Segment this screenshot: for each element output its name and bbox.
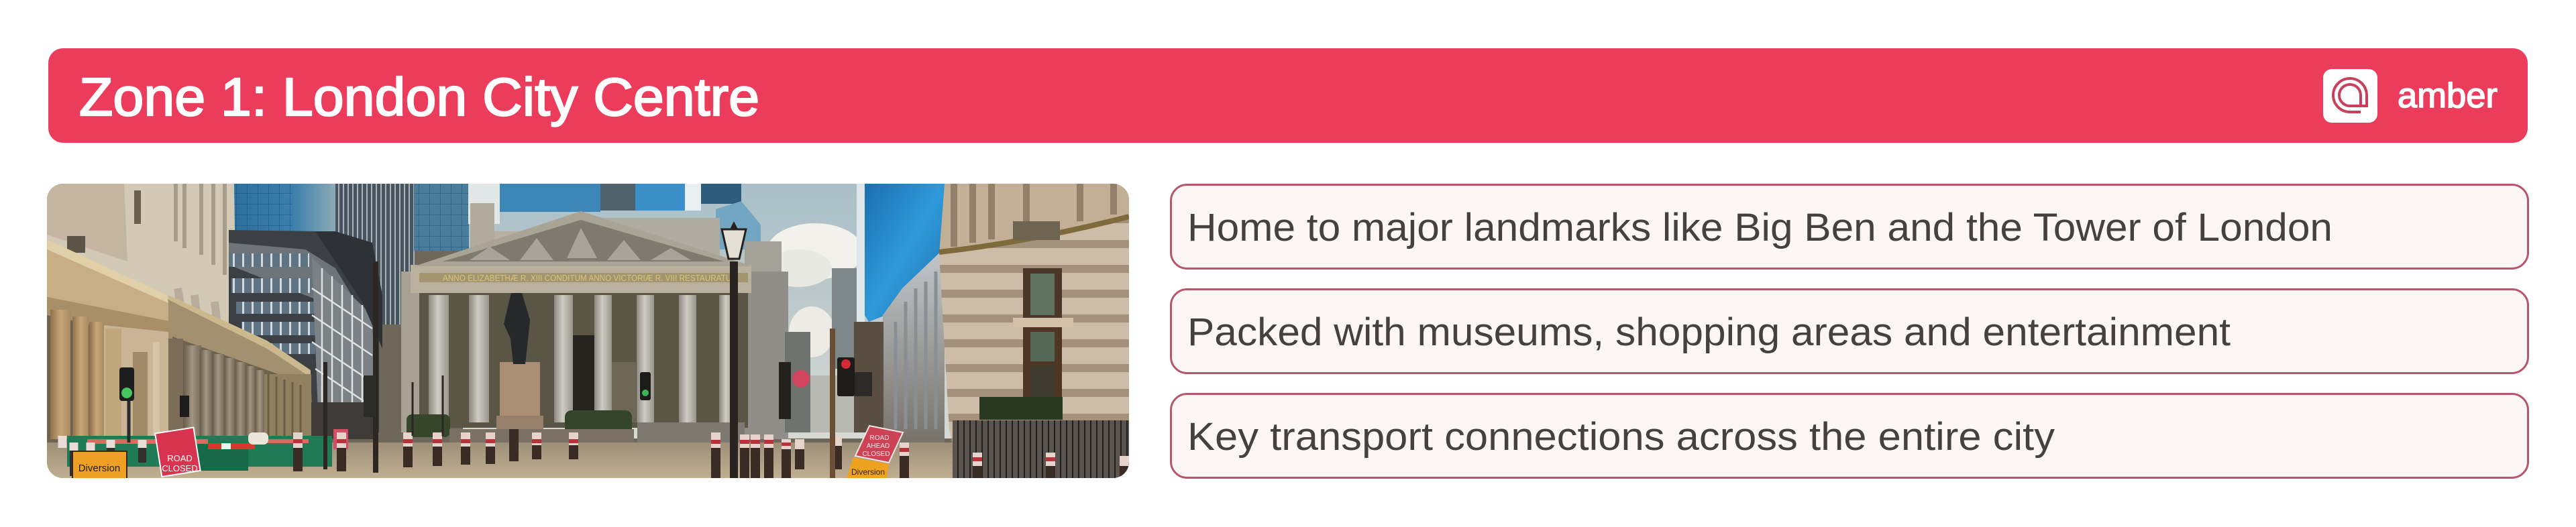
card: museums and shopping <box>1171 290 2528 373</box>
card: museums and shopping: Packed with museums, shopping areas and entertainment <box>1187 310 2231 354</box>
logo wordmark: amber <box>2398 76 2498 115</box>
hedges <box>407 410 745 443</box>
Royal Exchange building <box>401 203 810 439</box>
Bank of England colonnade <box>47 239 378 443</box>
portico interior <box>419 290 748 428</box>
title: Zone 1: London City Centre <box>79 67 759 127</box>
road and pavement <box>47 443 986 478</box>
sign: Road Closed <box>155 427 201 477</box>
Royal Exchange building: ANNO ELIZABETHÆ R. XIII CONDITUM ANNO VICTORIÆ R. VIII RESTAURATUM <box>443 273 738 283</box>
card: landmarks: Home to major landmarks like Big Ben and the Tower of London <box>1187 206 2332 249</box>
header banner <box>48 48 2528 143</box>
card: landmarks <box>1171 185 2528 268</box>
attic block <box>470 203 494 248</box>
bollards <box>62 429 1124 478</box>
white street buildings <box>810 248 945 443</box>
traffic lights <box>119 357 872 443</box>
iron railing fence <box>953 420 1129 478</box>
card: transport: Key transport connections across the entire city <box>1187 415 2055 459</box>
green barriers <box>67 429 348 471</box>
distant glass towers <box>229 184 945 325</box>
side wings <box>401 272 419 432</box>
dark curved office block <box>229 230 382 432</box>
banner background <box>48 48 2528 143</box>
entablature <box>411 265 751 293</box>
panel: key points <box>1171 185 2528 477</box>
icon: amber logo mark <box>2323 69 2377 123</box>
road signs <box>72 426 903 479</box>
lamp posts <box>325 221 833 478</box>
equestrian statue with pedestal <box>496 293 543 430</box>
card: transport <box>1171 394 2528 477</box>
sign: Road Ahead Closed <box>855 426 903 463</box>
sign: Road Ahead Closed: ROAD <box>870 434 889 442</box>
columns <box>429 295 449 422</box>
sign: Road Ahead Closed: AHEAD <box>867 443 890 450</box>
sign: Diversion <box>72 451 127 479</box>
sign: Diversion street: Diversion <box>851 467 885 477</box>
photo: Royal Exchange and Bank junction, London <box>47 184 1129 479</box>
Bank of England upper storey <box>47 184 235 330</box>
pediment <box>415 211 753 266</box>
right stone building <box>939 184 1129 478</box>
sign: Road Closed: CLOSED <box>162 463 198 473</box>
sign: Diversion street <box>847 457 889 478</box>
logo: amber <box>2323 69 2498 123</box>
sky with clouds <box>463 184 953 438</box>
sign: Road Ahead Closed: CLOSED <box>862 451 890 458</box>
sign: Diversion: Diversion <box>78 463 120 474</box>
sign: Road Closed: ROAD <box>167 453 193 463</box>
